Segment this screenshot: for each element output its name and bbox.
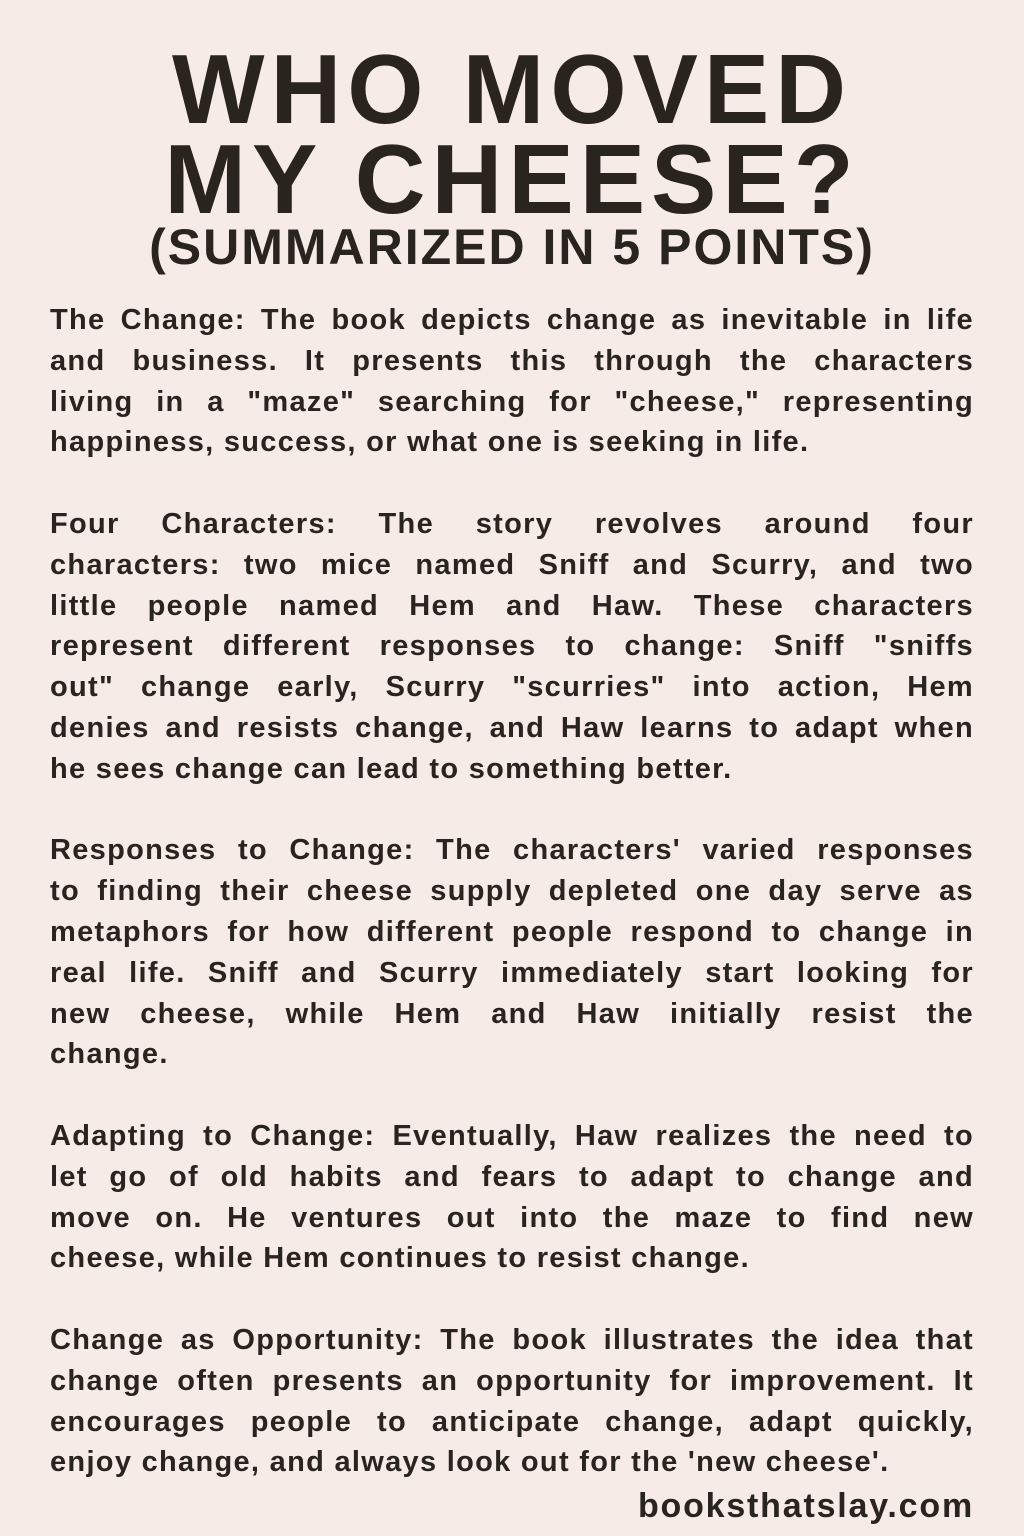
point 2: four characters: denies and resists change, and Haw learns to adapt when	[50, 712, 974, 744]
subtitle: (SUMMARIZED IN 5 POINTS)	[149, 219, 875, 275]
point 3: responses to change: new cheese, while Hem and Haw initially resist the	[50, 998, 974, 1030]
point 3: responses to change: to finding their cheese supply depleted one day serve as	[50, 875, 974, 907]
point 5: change as opportunity: encourages people to anticipate change, adapt quickly,	[50, 1406, 974, 1438]
footer: website: booksthatslay.com	[638, 1487, 974, 1525]
point 5: change as opportunity: Change as Opportunity: The book illustrates the idea that	[50, 1324, 974, 1356]
point 1: the change: and business. It presents this through the characters	[50, 345, 974, 377]
point 1: the change: happiness, success, or what one is seeking in life.	[50, 426, 809, 458]
point 2: four characters: characters: two mice named Sniff and Scurry, and two	[50, 549, 974, 581]
point 4: adapting to change: move on. He ventures out into the maze to find new	[50, 1202, 974, 1234]
point 4: adapting to change: let go of old habits and fears to adapt to change and	[50, 1161, 974, 1193]
point 3: responses to change: change.	[50, 1038, 169, 1070]
point 2: four characters	[50, 508, 974, 785]
body text	[50, 304, 974, 1478]
point 3: responses to change	[50, 834, 974, 1070]
point 2: four characters: Four Characters: The story revolves around four	[50, 508, 974, 540]
title line 2: MY CHEESE?	[164, 124, 860, 234]
point 4: adapting to change: cheese, while Hem continues to resist change.	[50, 1242, 750, 1274]
point 2: four characters: he sees change can lead to something better.	[50, 753, 732, 785]
point 2: four characters: out" change early, Scurry "scurries" into action, Hem	[50, 671, 974, 703]
point 2: four characters: little people named Hem and Haw. These characters	[50, 590, 974, 622]
point 5: change as opportunity: change often presents an opportunity for improvement. It	[50, 1365, 974, 1397]
point 1: the change: The Change: The book depicts change as inevitable in life	[50, 304, 974, 336]
point 5: change as opportunity: enjoy change, and always look out for the 'new cheese'.	[50, 1446, 890, 1478]
title line 1: WHO MOVED	[172, 34, 852, 144]
point 2: four characters: represent different responses to change: Sniff "sniffs	[50, 630, 974, 662]
point 4: adapting to change: Adapting to Change: Eventually, Haw realizes the need to	[50, 1120, 974, 1152]
point 4: adapting to change	[50, 1120, 974, 1274]
point 5: change as opportunity	[50, 1324, 974, 1478]
point 1: the change	[50, 304, 974, 458]
point 1: the change: living in a "maze" searching for "cheese," representing	[50, 386, 974, 418]
point 3: responses to change: real life. Sniff and Scurry immediately start looking for	[50, 957, 974, 989]
point 3: responses to change: Responses to Change: The characters' varied responses	[50, 834, 974, 866]
point 3: responses to change: metaphors for how different people respond to change in	[50, 916, 974, 948]
